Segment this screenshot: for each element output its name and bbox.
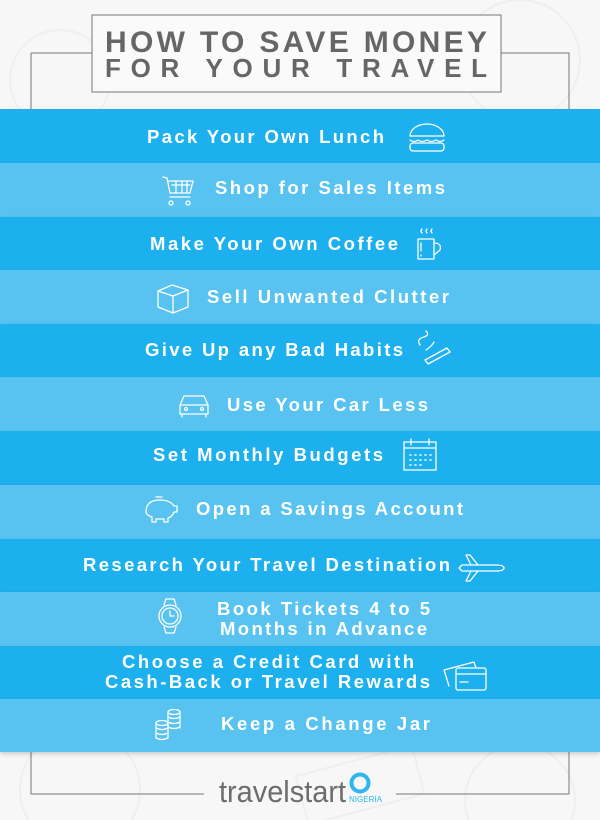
title: FOR YOUR TRAVEL — [105, 53, 487, 83]
logo: NIGERIA — [349, 795, 383, 804]
icon: coins — [156, 710, 180, 740]
icon: car — [180, 396, 208, 417]
band 5: Give Up any Bad Habits — [145, 339, 403, 360]
icon: coffee — [418, 229, 440, 259]
band 10: Months in Advance — [220, 618, 427, 639]
band 9: Research Your Travel Destination — [83, 554, 450, 575]
title: HOW TO SAVE MONEY — [105, 26, 487, 59]
band 10: Book Tickets 4 to 5 — [217, 598, 430, 619]
band 7 — [0, 431, 600, 485]
band 5 — [0, 324, 600, 377]
band 11: Cash-Back or Travel Rewards — [105, 671, 430, 692]
icon: credit card — [444, 662, 486, 690]
band 2 — [0, 163, 600, 217]
band 12: Keep a Change Jar — [221, 713, 430, 734]
icon: watch — [159, 599, 181, 633]
band 10 — [0, 592, 600, 646]
title — [92, 15, 501, 92]
band 2: Shop for Sales Items — [215, 177, 445, 198]
band 4: Sell Unwanted Clutter — [207, 286, 449, 307]
icon: cart — [163, 177, 193, 205]
band 3 — [0, 217, 600, 270]
band 12 — [0, 699, 600, 752]
band 7: Set Monthly Budgets — [153, 444, 383, 465]
band 8 — [0, 485, 600, 539]
icon: burger — [410, 124, 444, 151]
band 9 — [0, 539, 600, 592]
band 6 — [0, 377, 600, 431]
icon: calendar — [404, 439, 436, 470]
band 8: Open a Savings Account — [196, 498, 463, 519]
icon: box — [158, 285, 188, 313]
logo: travelstart — [219, 774, 346, 809]
band 11: Choose a Credit Card with — [122, 651, 414, 672]
band 3: Make Your Own Coffee — [150, 233, 398, 254]
icon: plane — [459, 555, 504, 581]
band 1: Pack Your Own Lunch — [147, 126, 384, 147]
band 6: Use Your Car Less — [227, 394, 428, 415]
band 1 — [0, 109, 600, 163]
icon: cigarette — [419, 331, 450, 364]
icon: piggy bank — [146, 497, 177, 522]
band 4 — [0, 270, 600, 324]
band 11 — [0, 646, 600, 699]
